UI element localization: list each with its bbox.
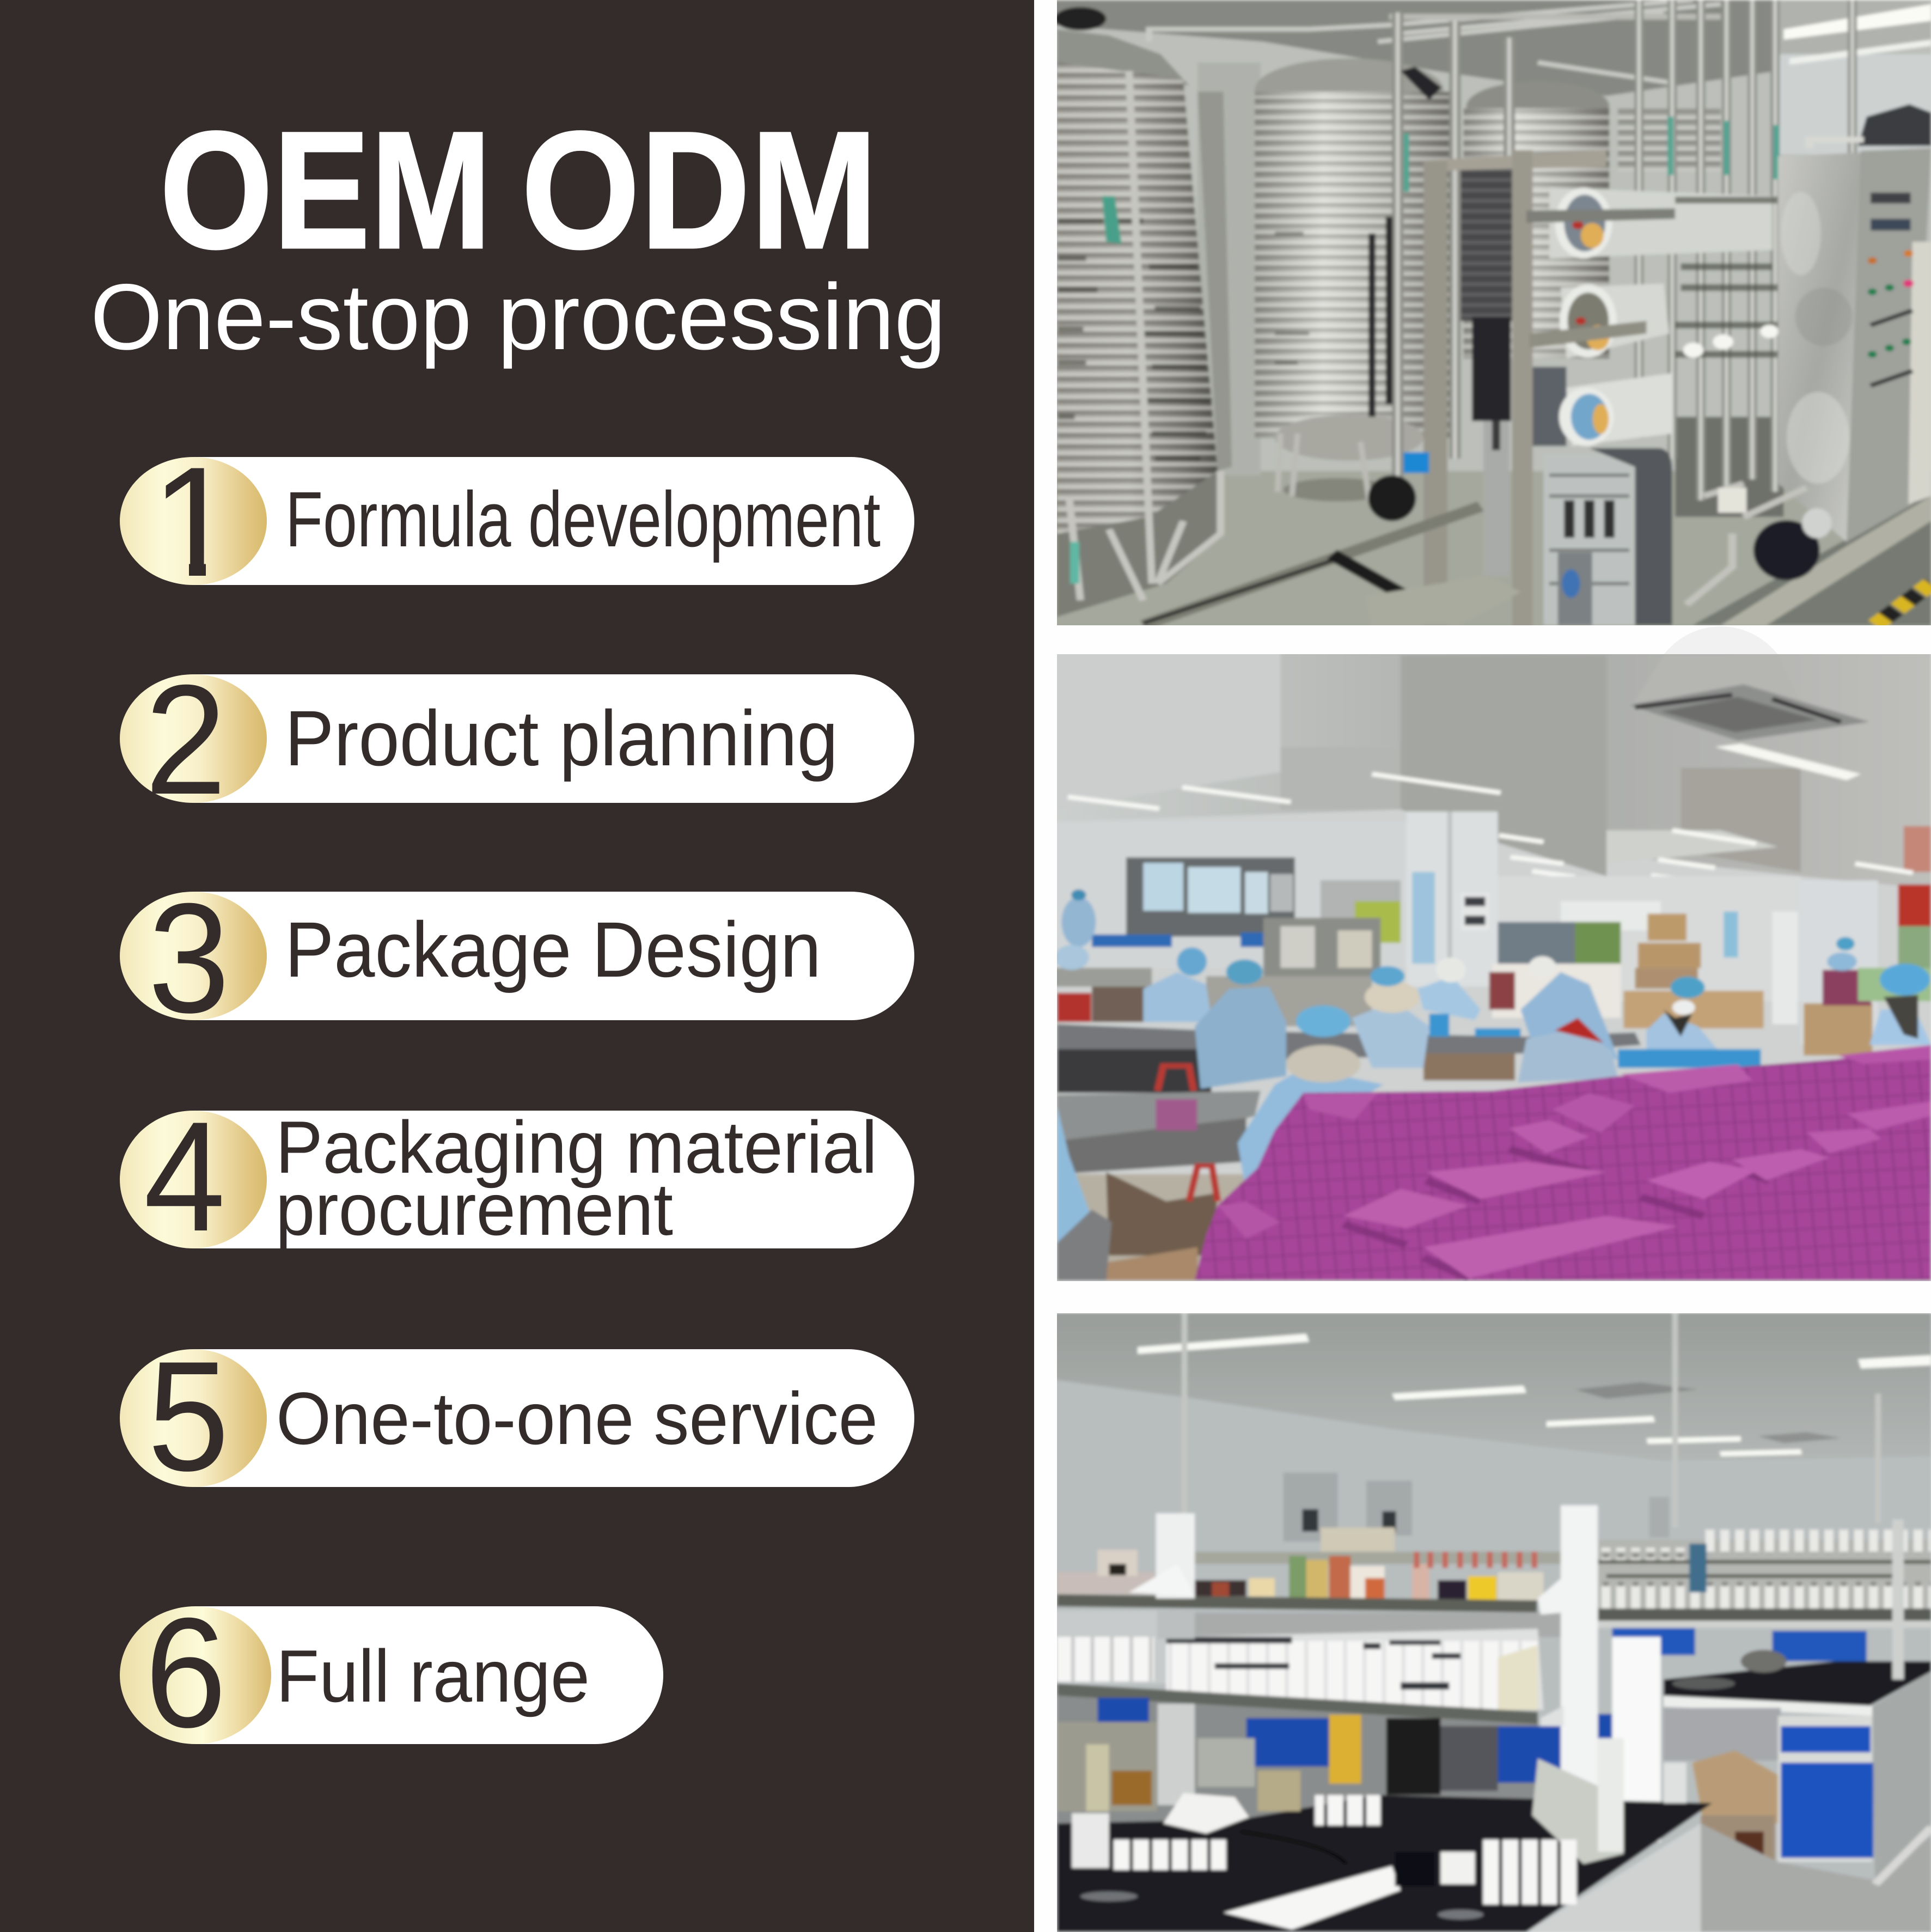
step 2: Product planning: Product planning <box>285 694 838 782</box>
watermark: faint circle <box>1647 626 1794 779</box>
photo: water treatment equipment <box>1052 0 1931 630</box>
photo: laboratory <box>1052 1313 1931 1932</box>
step 5: One-to-one service <box>120 1328 914 1503</box>
step 4: Packaging material procurement: Packaging material <box>276 1106 877 1189</box>
title: OEM ODM: OEM <box>160 97 492 284</box>
title: OEM ODM <box>160 97 878 284</box>
step 3: Package Design: Package Design <box>285 906 821 994</box>
step 1: Formula development <box>120 457 914 585</box>
step 6: Full range: 6 <box>145 1585 227 1760</box>
step 4: Packaging material procurement <box>120 1089 914 1264</box>
step 6: Full range: Full range <box>276 1635 590 1717</box>
photo: packaging workshop <box>1052 651 1931 1285</box>
title: OEM ODM: ODM <box>521 97 878 284</box>
step 5: One-to-one service: One-to-one service <box>276 1377 878 1460</box>
subtitle: One-stop processing: One-stop processing <box>90 265 946 369</box>
panel: dark services column <box>0 0 1034 1932</box>
step 4: Packaging material procurement: procurement <box>276 1168 673 1251</box>
step 4: Packaging material procurement: 4 <box>144 1089 225 1264</box>
step 5: One-to-one service: 5 <box>148 1328 229 1503</box>
step 3: Package Design <box>120 870 914 1045</box>
step 2: Product planning <box>120 652 914 827</box>
step 1: Formula development: 1 <box>151 434 238 609</box>
step 1: Formula development: Formula development <box>285 476 881 563</box>
step 3: Package Design: 3 <box>148 870 230 1045</box>
step 6: Full range <box>120 1585 663 1760</box>
step 2: Product planning: 2 <box>145 652 227 827</box>
